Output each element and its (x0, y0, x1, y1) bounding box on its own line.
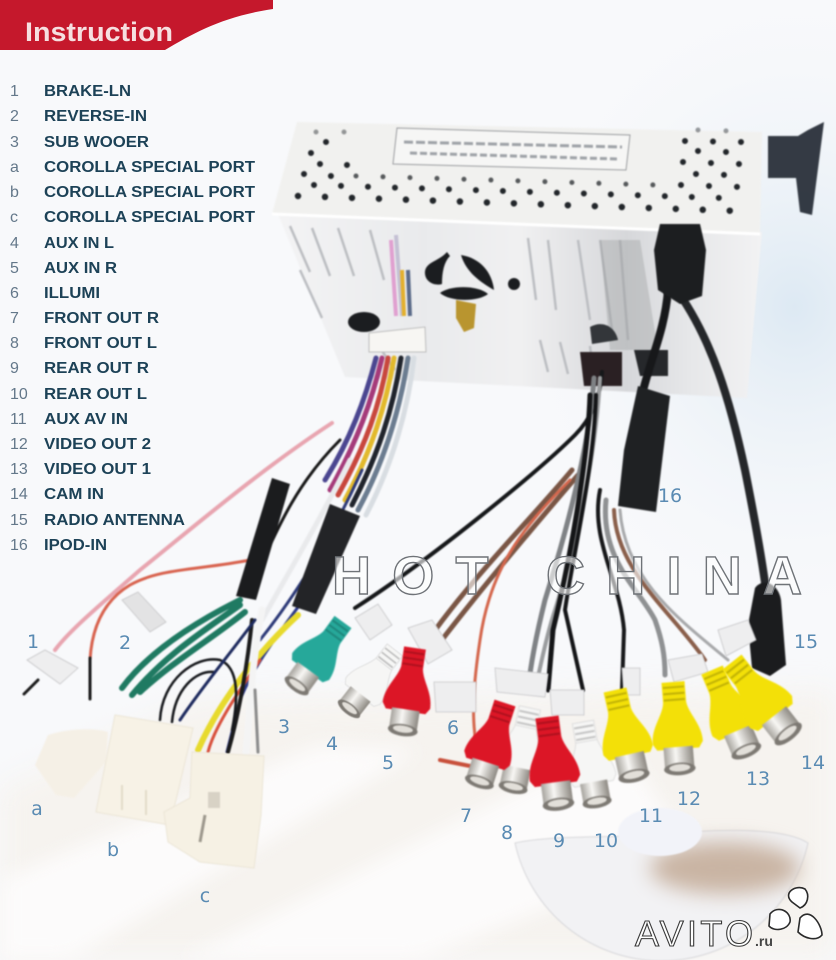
port legend list: 9 (10, 360, 19, 377)
callout numbers on photo: 7 (460, 805, 472, 827)
port legend list: AUX IN R (44, 260, 117, 277)
port legend list: ILLUMI (44, 285, 100, 302)
port legend list: AUX IN L (44, 235, 114, 252)
RCA connector 4 white (329, 637, 412, 726)
Corolla connector c (164, 752, 264, 868)
callout numbers on photo: 16 (658, 485, 682, 507)
port legend list: 3 (10, 134, 19, 151)
reverse wire red (90, 560, 250, 660)
AV socket (580, 352, 622, 386)
inline black module (236, 478, 290, 600)
radio antenna plug (748, 583, 786, 676)
brass antenna screw (456, 300, 476, 332)
sticker label (393, 128, 630, 170)
Corolla connector a (35, 729, 108, 798)
port legend list: 2 (10, 108, 19, 125)
port legend list: b (10, 184, 19, 201)
port legend list: 13 (10, 461, 28, 478)
RCA connector 5 red (378, 644, 439, 740)
callout numbers on photo: 8 (501, 822, 513, 844)
callout numbers on photo: 12 (677, 788, 701, 810)
port legend list: COROLLA SPECIAL PORT (44, 184, 255, 201)
RCA connector 3 green (275, 609, 361, 704)
port legend list: 12 (10, 436, 28, 453)
callout numbers on photo: c (200, 885, 210, 907)
callout numbers on photo: b (107, 839, 119, 861)
callout numbers on photo: 9 (553, 830, 565, 852)
multicolour main bundle (325, 358, 414, 515)
wiring harness (24, 290, 766, 768)
RCA connector 12 yellow (648, 680, 705, 777)
port legend list: REAR OUT R (44, 360, 149, 377)
RCA connector 14 yellow (711, 646, 813, 755)
title banner: Instruction (25, 17, 173, 47)
main black multi plug (654, 224, 706, 304)
antenna cable (678, 292, 766, 590)
panel cutouts (348, 252, 520, 332)
rear AV cable bundle (355, 372, 602, 608)
RCA connector 13 yellow (689, 660, 772, 767)
port legend list: 16 (10, 537, 28, 554)
port legend list: 6 (10, 285, 19, 302)
port legend list: COROLLA SPECIAL PORT (44, 209, 255, 226)
port legend list: 11 (10, 411, 27, 428)
CD disc (515, 808, 808, 960)
RCA connector 7 red (455, 696, 528, 795)
watermark HOT CHINA: HOT CHINA (332, 546, 802, 606)
callout numbers on photo: 11 (639, 805, 663, 827)
RCA connector 11 yellow (590, 684, 660, 788)
port legend list: REAR OUT L (44, 386, 147, 403)
callout numbers on photo: 2 (119, 632, 131, 654)
port legend list: VIDEO OUT 1 (44, 461, 151, 478)
port legend list: 1 (10, 83, 19, 100)
title banner (0, 0, 273, 50)
port legend list: IPOD-IN (44, 537, 107, 554)
AVITO watermark logo (635, 888, 822, 954)
RCA connector 9 red (522, 714, 585, 814)
callout numbers on photo: 3 (278, 716, 290, 738)
port legend list: REVERSE-IN (44, 108, 147, 125)
port legend list: COROLLA SPECIAL PORT (44, 159, 255, 176)
callout numbers on photo: 14 (801, 752, 825, 774)
logo petals (769, 888, 822, 939)
RCA connector 10 white (560, 718, 621, 812)
callout numbers on photo: 4 (326, 733, 338, 755)
port legend list: 15 (10, 512, 28, 529)
iPod lead and plug (642, 290, 668, 395)
rear panel (278, 214, 762, 398)
port legend list: FRONT OUT R (44, 310, 159, 327)
car radio head unit (272, 122, 824, 398)
callout numbers on photo: 1 (27, 631, 39, 653)
port legend list: BRAKE-LN (44, 83, 131, 100)
port legend list: CAM IN (44, 486, 104, 503)
port legend list: RADIO ANTENNA (44, 512, 185, 529)
wire loom entering socket (391, 235, 410, 316)
port legend list: FRONT OUT L (44, 335, 157, 352)
callout numbers on photo: 5 (382, 752, 394, 774)
port legend list: 14 (10, 486, 28, 503)
callout numbers on photo: 15 (794, 631, 818, 653)
callout numbers on photo (27, 485, 825, 907)
port legend list: SUB WOOER (44, 134, 149, 151)
port legend list: 10 (10, 386, 28, 403)
port legend list (10, 83, 255, 554)
port legend list: 7 (10, 310, 19, 327)
callout numbers on photo: a (31, 798, 43, 820)
port legend list: c (10, 209, 18, 226)
wire tags (27, 592, 756, 715)
mounting bracket (768, 122, 824, 215)
AVITO watermark logo: AVITO (635, 913, 753, 954)
port legend list: AUX AV IN (44, 411, 128, 428)
white harness socket (369, 327, 426, 352)
callout numbers on photo: 13 (746, 768, 770, 790)
callout numbers on photo: 6 (447, 717, 459, 739)
top cover (272, 122, 762, 234)
ventilation holes (298, 130, 742, 211)
port legend list: VIDEO OUT 2 (44, 436, 151, 453)
lower branch wires to Corolla plugs (227, 560, 330, 752)
Corolla connector b (96, 715, 193, 825)
green subwoofer wires (122, 600, 245, 695)
port legend list: 5 (10, 260, 19, 277)
AVITO watermark logo: .ru (755, 933, 773, 949)
port legend list: a (10, 159, 19, 176)
port legend list: 8 (10, 335, 19, 352)
callout numbers on photo: 10 (594, 830, 618, 852)
brake wire pink (55, 423, 332, 650)
port legend list: 4 (10, 235, 19, 252)
RCA connector 8 white (489, 703, 553, 798)
